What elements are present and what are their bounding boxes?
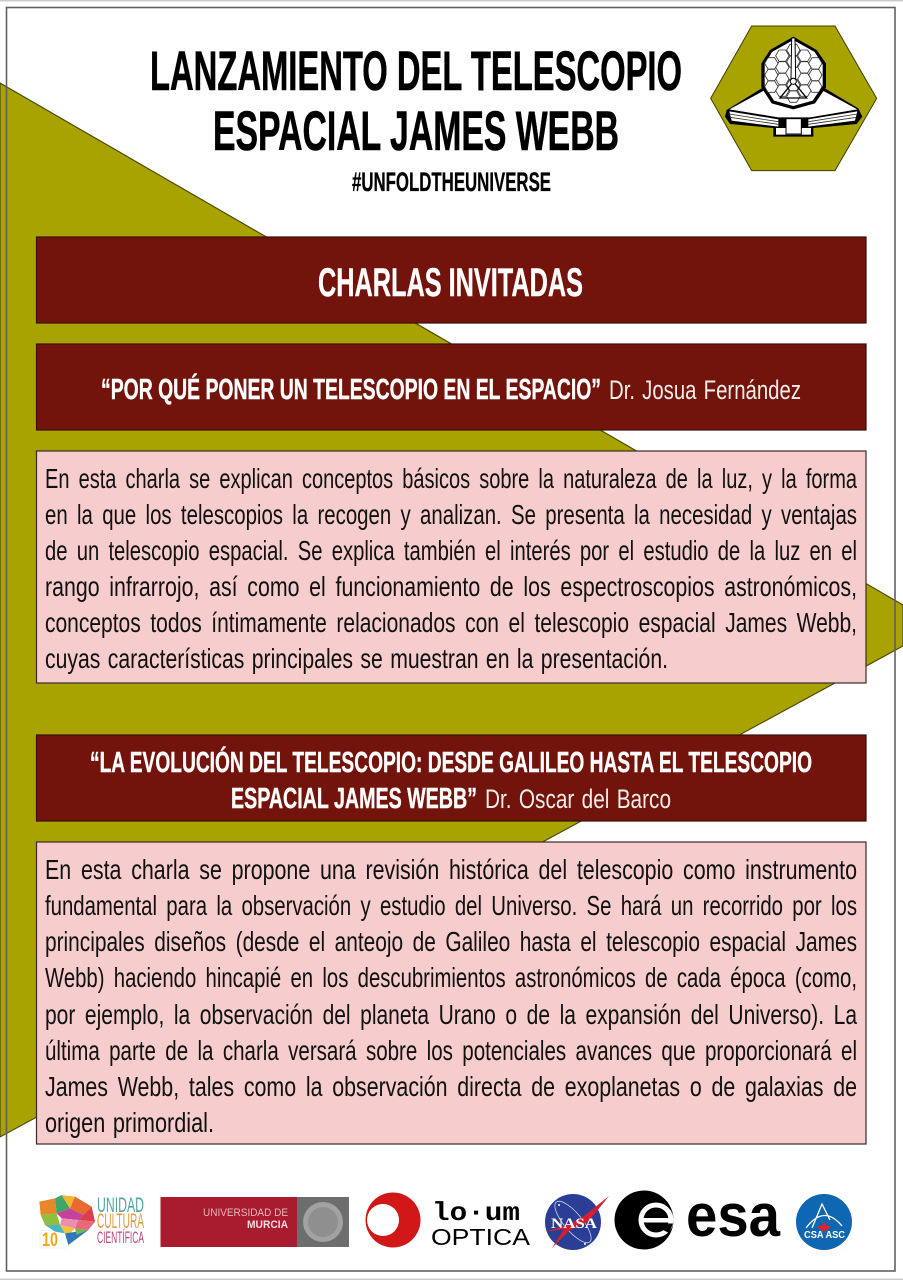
logo: ESA: esa	[686, 1182, 781, 1249]
title: ESPACIAL JAMES WEBB	[213, 99, 619, 162]
logo: NASA: NASA	[551, 1216, 597, 1232]
panel: talk 1 description: cuyas características principales se muestran en la presentación.	[45, 643, 668, 674]
icon: James Webb telescope hexagon badge	[711, 26, 877, 171]
logo: Universidad de Murcia: UNIVERSIDAD DE	[203, 1207, 288, 1219]
logo: Unidad de Cultura Científica: 10	[42, 1230, 58, 1251]
panel: talk 1 description	[36, 451, 866, 683]
panel: talk 2 description: origen primordial.	[45, 1107, 214, 1138]
logo: Universidad de Murcia: MURCIA	[247, 1219, 288, 1231]
panel: talk 2 title	[36, 735, 866, 821]
logo: lo-um Optica	[366, 1192, 531, 1250]
logo: Unidad de Cultura Científica	[39, 1194, 144, 1251]
logo: Canadian Space Agency: CSA ASC	[804, 1230, 845, 1241]
heading: charlas invitadas: CHARLAS INVITADAS	[318, 261, 583, 305]
panel: talk 2 title: Dr. Oscar del Barco	[485, 784, 671, 814]
title	[150, 39, 682, 162]
logo: Unidad de Cultura Científica: UNIDAD	[97, 1194, 144, 1217]
panel: talk 1 title: Dr. Josua Fernández	[609, 375, 801, 405]
panel: talk 1 title	[36, 344, 866, 430]
panel: talk 2 description	[36, 842, 866, 1144]
logo: Universidad de Murcia	[160, 1197, 349, 1247]
panel: section heading	[36, 237, 866, 323]
logo: NASA	[545, 1194, 609, 1250]
logo: Canadian Space Agency	[796, 1194, 852, 1250]
hashtag: #UNFOLDTHEUNIVERSE	[352, 167, 551, 197]
logo: lo-um Optica: OPTICA	[431, 1224, 531, 1250]
logo: ESA	[614, 1182, 781, 1250]
logo: lo-um Optica: lo·um	[432, 1198, 520, 1228]
panel: talk 1 title: “POR QUÉ PONER UN TELESCOPIO EN EL ESPACIO”	[101, 372, 601, 406]
text: CULTURA	[97, 1210, 144, 1233]
logo: Unidad de Cultura Científica: CIENTÍFICA	[97, 1228, 144, 1247]
panel: talk 2 title: ESPACIAL JAMES WEBB”	[231, 783, 477, 815]
